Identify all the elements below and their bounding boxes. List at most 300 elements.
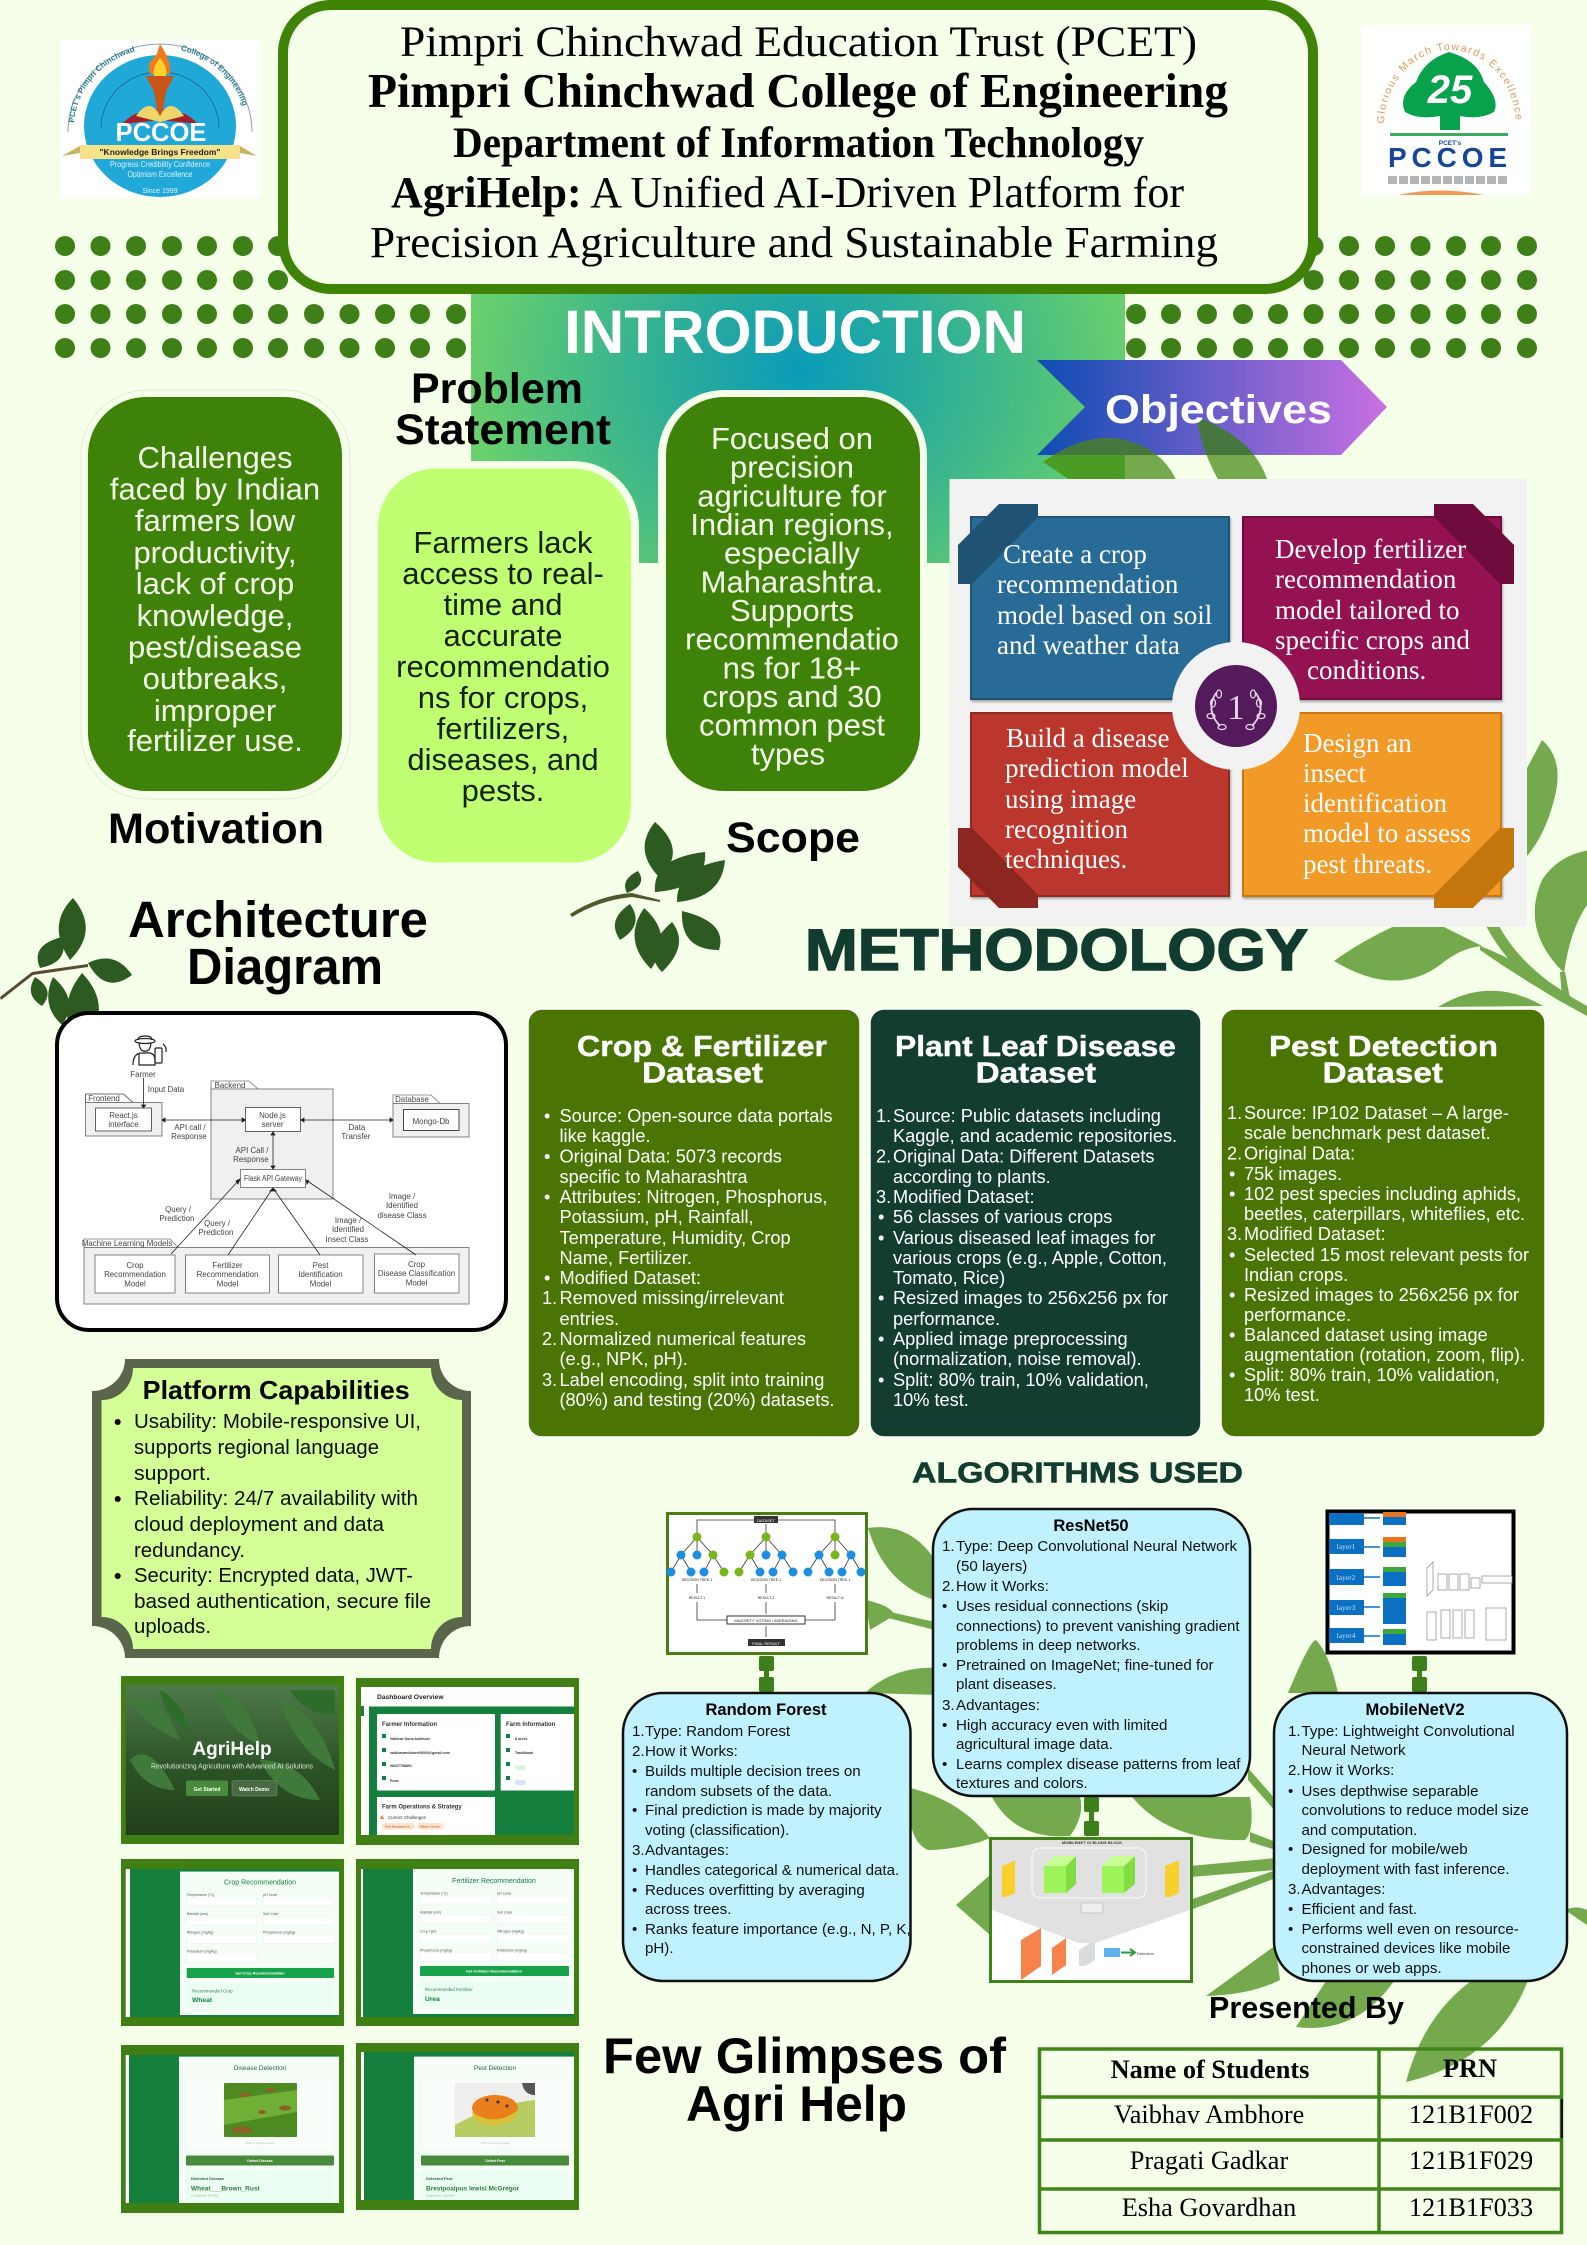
backend package: Node.js [259, 1111, 286, 1120]
screenshot: fertilizer recommendation [356, 1859, 579, 2026]
image: mobilenet block diagram: Detection [1137, 1951, 1154, 1956]
panel: pest detection dataset: • [1229, 1325, 1235, 1345]
objectives arrow [1037, 360, 1387, 455]
objective: insect identification: pest threats. [1303, 849, 1432, 879]
objective: fertilizer recommendation: recommendation [1275, 564, 1457, 594]
panel: architecture diagram: Input Data [148, 1085, 185, 1094]
arrow labels: Transfer [341, 1132, 371, 1141]
panel: resnet50: Learns complex disease patterns from leaf [956, 1756, 1241, 1773]
frontend package [86, 1094, 162, 1136]
panel: plant leaf disease dataset: • [878, 1288, 884, 1308]
panel: plant leaf disease dataset: • [878, 1207, 884, 1227]
panel: plant leaf disease dataset: 10% test. [893, 1390, 969, 1410]
image: mobilenet block diagram: MOBILENET V2 BLDNG BLOCK [1062, 1840, 1122, 1845]
panel: platform capabilities: Usability: Mobile-responsive UI, [134, 1411, 421, 1433]
panel: crop and fertilizer dataset: Label encoding, split into training [560, 1370, 824, 1390]
panel: mobilenetv2: Neural Network [1302, 1742, 1406, 1759]
screenshot: fertilizer recommendation: Crop Type [420, 1930, 437, 1934]
image: random forest diagram [666, 1514, 866, 1654]
objective: crop recommendation: model based on soil [997, 600, 1212, 630]
frontend package: Frontend [88, 1094, 120, 1103]
panel: platform capabilities: cloud deployment and data [134, 1514, 385, 1536]
panel: crop and fertilizer dataset: specific to Maharashtra [560, 1167, 748, 1187]
panel: pest detection dataset: Modified Dataset: [1244, 1224, 1386, 1244]
panel: plant leaf disease dataset: 56 classes of various crops [893, 1207, 1112, 1227]
backend package: Flask API Gateway [244, 1174, 302, 1183]
panel: pest detection dataset: augmentation (rotation, zoom, flip). [1244, 1345, 1525, 1365]
image: random forest diagram: DATASET [757, 1518, 775, 1523]
objective: insect identification [1243, 713, 1514, 908]
panel: mobilenetv2: Designed for mobile/web [1302, 1841, 1468, 1858]
arrow labels: disease Class [377, 1211, 427, 1220]
screenshot: fertilizer recommendation: Recommended Fertilizer [425, 1987, 473, 1992]
screenshot: pest detection: Detect Pest [485, 2159, 506, 2163]
arrow labels: Data [349, 1123, 366, 1132]
panel: mobilenetv2: Uses depthwise separable [1302, 1783, 1479, 1800]
image: random forest diagram: DECISION TREE-1 [820, 1578, 850, 1582]
heading: few glimpses [603, 2027, 1006, 2132]
screenshot: crop recommendation: Phosphorus (mg/kg) [263, 1930, 295, 1934]
panel: pest detection dataset [1221, 1009, 1545, 1437]
panel: scope: agriculture for [697, 478, 887, 513]
screenshot: dashboard overview [356, 1678, 579, 1845]
logo: 25 years [1361, 25, 1531, 195]
logo: PCCOE crest: PCCOE [116, 117, 206, 147]
logo: PCCOE crest [60, 40, 261, 198]
panel: random forest: 1. [632, 1723, 645, 1740]
panel: pest detection dataset: Source: IP102 Dataset – A large- [1244, 1103, 1509, 1123]
panel: motivation: productivity, [133, 535, 297, 570]
panel: pest detection dataset: 10% test. [1244, 1385, 1320, 1405]
panel: crop and fertilizer dataset: Potassium, pH, Rainfall, [560, 1207, 754, 1227]
objective: disease prediction: recognition [1005, 814, 1128, 844]
panel: plant leaf disease dataset [870, 1009, 1201, 1437]
arrow labels: Image / [335, 1216, 362, 1225]
panel: crop and fertilizer dataset: Source: Open-source data portals [560, 1106, 832, 1126]
panel: scope: Maharashtra. [701, 564, 883, 599]
screenshot: crop recommendation: Recommended Crop [192, 1988, 233, 1994]
objective: insect identification: identification [1303, 788, 1447, 818]
panel: scope: Supports [730, 593, 854, 628]
screenshot: disease detection: Disease Detection [234, 2065, 287, 2072]
screenshot: fertilizer recommendation: Urea [425, 1996, 440, 2003]
logo: PCCOE crest: Since 1999 [142, 188, 178, 195]
panel: mobilenetv2: 1. [1288, 1723, 1301, 1740]
database package [393, 1095, 469, 1137]
panel: resnet50: • [942, 1657, 947, 1674]
panel: plant leaf disease dataset: • [878, 1370, 884, 1390]
panel: pest detection dataset: 1. [1227, 1103, 1242, 1123]
panel: plant leaf disease dataset: Dataset [976, 1058, 1096, 1090]
panel: problem statement [370, 461, 639, 870]
panel: mobilenetv2: phones or web apps. [1302, 1960, 1442, 1977]
panel: scope: Focused on [711, 421, 873, 456]
backend package: server [262, 1120, 284, 1129]
panel: random forest: voting (classification). [645, 1822, 789, 1839]
panel: resnet50: How it Works: [956, 1578, 1049, 1595]
panel: plant leaf disease dataset: 1. [876, 1106, 891, 1126]
panel: mobilenetv2: Efficient and fast. [1302, 1901, 1417, 1918]
panel: random forest: Builds multiple decision trees on [645, 1763, 861, 1780]
screenshot: disease detection: Wheat___Brown_Rust [191, 2186, 260, 2192]
panel: scope: common pest [699, 708, 885, 743]
panel: random forest: Final prediction is made by majority [645, 1802, 882, 1819]
panel: plant leaf disease dataset: performance. [893, 1309, 1000, 1329]
screenshot: crop recommendation: Get Crop Recommendation [235, 1972, 285, 1976]
panel: resnet50: textures and colors. [956, 1775, 1088, 1792]
panel: scope [658, 390, 927, 799]
panel: crop and fertilizer dataset: • [544, 1187, 550, 1207]
panel: crop and fertilizer dataset: 2. [542, 1329, 557, 1349]
panel: plant leaf disease dataset: (normalization, noise removal). [893, 1349, 1142, 1369]
panel: mobilenetv2: and computation. [1302, 1822, 1417, 1839]
screenshot: pest detection: Confidence: 100.00% [426, 2194, 455, 2198]
arrow labels: Query / [204, 1219, 231, 1228]
title panel: AgriHelp: A Unified AI-Driven Platform for [391, 168, 1184, 217]
heading: architecture diagram: Diagram [187, 938, 383, 995]
database package: Database [395, 1095, 429, 1104]
screenshot: dashboard overview: Market Access [420, 1824, 440, 1828]
panel: motivation: Challenges [137, 440, 293, 475]
screenshot: dashboard overview: Pune [390, 1779, 399, 1783]
panel: pest detection dataset: • [1229, 1164, 1235, 1184]
introduction gradient banner [471, 294, 1125, 563]
heading: algorithms used: ALGORITHMS USED [912, 1458, 1243, 1490]
table: students: Esha Govardhan [1122, 2193, 1296, 2222]
image: random forest diagram: RESULT-N [826, 1596, 844, 1600]
panel: plant leaf disease dataset: Source: Public datasets including [893, 1106, 1161, 1126]
screenshot: crop recommendation [121, 1859, 344, 2026]
panel: pest detection dataset: • [1229, 1365, 1235, 1385]
objective: disease prediction: using image [1005, 784, 1136, 814]
panel: plant leaf disease dataset: according to plants. [893, 1167, 1051, 1187]
panel: scope: especially [724, 536, 861, 571]
panel: crop and fertilizer dataset: Temperature, Humidity, Crop [560, 1228, 791, 1248]
objectives label: Objectives [1105, 388, 1332, 432]
screenshot: dashboard overview: 8 acres [515, 1737, 527, 1741]
panel: scope: ns for 18+ [723, 650, 861, 685]
heading: problem statement [395, 365, 611, 454]
panel: mobilenetv2: 3. [1288, 1881, 1301, 1898]
arrow labels: Prediction [198, 1228, 233, 1237]
panel: resnet50: Type: Deep Convolutional Neural Network [956, 1538, 1238, 1555]
panel: resnet50: connections) to prevent vanishing gradient [956, 1618, 1240, 1635]
objective: insect identification: Design an [1303, 728, 1412, 758]
table: students: Name of Students [1111, 2055, 1309, 2084]
database package: Mongo-Db [413, 1117, 450, 1126]
panel: objectives infographic [950, 479, 1527, 927]
panel: mobilenetv2: Type: Lightweight Convolutional [1302, 1723, 1515, 1740]
screenshot: dashboard overview: Current Challenges [388, 1815, 427, 1820]
table: students [1039, 2049, 1563, 2232]
panel: platform capabilities: uploads. [134, 1616, 211, 1638]
panel: resnet50: • [942, 1717, 947, 1734]
screenshot: dashboard overview: 08037798891 [390, 1764, 412, 1768]
screenshot: agrihelp landing page: Revolutionizing Agriculture with Advanced AI Solutions [151, 1762, 313, 1771]
screenshot: disease detection: Detect Disease [247, 2159, 273, 2163]
panel: problem statement: diseases, and [407, 742, 599, 777]
panel: platform capabilities [92, 1359, 471, 1658]
objective: fertilizer recommendation: model tailored to [1275, 595, 1459, 625]
dot pattern left [55, 236, 466, 358]
panel: scope: types [751, 736, 825, 771]
screenshot: dashboard overview: Pest Management [385, 1824, 410, 1828]
objective: fertilizer recommendation: Develop fertilizer [1275, 534, 1466, 564]
panel: random forest: random subsets of the data. [645, 1783, 832, 1800]
objective: fertilizer recommendation: specific crops and [1275, 625, 1470, 655]
panel: crop and fertilizer dataset: Original Data: 5073 records [560, 1146, 782, 1166]
arrow labels: Response [233, 1155, 269, 1164]
panel: resnet50: Uses residual connections (skip [956, 1598, 1168, 1615]
panel: mobilenetv2: • [1288, 1901, 1293, 1918]
screenshot: fertilizer recommendation: pH Level [497, 1892, 511, 1896]
objective: disease prediction [958, 713, 1229, 908]
panel: platform capabilities: redundancy. [134, 1540, 245, 1562]
screenshot: crop recommendation: Nitrogen (mg/kg) [187, 1930, 213, 1934]
panel: platform capabilities: support. [134, 1463, 211, 1485]
machine learning package: Machine Learning Models [82, 1239, 172, 1248]
heading: motivation: Motivation [108, 805, 324, 853]
panel: architecture diagram [57, 1013, 506, 1330]
screenshot: agrihelp landing page: Get Started [194, 1787, 220, 1793]
panel: pest detection dataset: Split: 80% train, 10% validation, [1244, 1365, 1500, 1385]
panel: pest detection dataset: 2. [1227, 1144, 1242, 1164]
logo: PCCOE crest: PCET's Pimpri Chinchwad [68, 46, 135, 122]
table: students: 121B1F033 [1409, 2193, 1533, 2222]
panel: mobilenetv2: constrained devices like mobile [1302, 1940, 1510, 1957]
objective: crop recommendation [958, 504, 1229, 699]
panel: random forest: Type: Random Forest [645, 1723, 791, 1740]
panel: mobilenetv2 [1274, 1693, 1567, 1981]
panel: plant leaf disease dataset: Split: 80% train, 10% validation, [893, 1370, 1149, 1390]
heading: methodology: METHODOLOGY [805, 918, 1308, 983]
title panel: Precision Agriculture and Sustainable Farming [370, 218, 1218, 267]
panel: random forest [623, 1693, 911, 1981]
screenshot: dashboard overview: Dashboard Overview [377, 1694, 444, 1701]
panel: motivation: fertilizer use. [127, 723, 303, 758]
heading: problem statement: Problem [411, 365, 583, 413]
image: mobilenet block diagram [990, 1838, 1192, 1982]
panel: random forest: • [632, 1802, 637, 1819]
panel: plant leaf disease dataset: • [878, 1329, 884, 1349]
panel: mobilenetv2: convolutions to reduce model size [1302, 1802, 1529, 1819]
panel: problem statement: accurate [444, 618, 562, 653]
objective: crop recommendation: recommendation [997, 569, 1179, 599]
screenshot: agrihelp landing page [121, 1676, 344, 1844]
image: resnet diagram: layer1 [1337, 1542, 1356, 1551]
panel: problem statement: access to real- [402, 556, 604, 591]
panel: platform capabilities: Reliability: 24/7 availability with [134, 1488, 418, 1510]
panel: pest detection dataset: 75k images. [1244, 1164, 1342, 1184]
panel: pest detection dataset: 102 pest species including aphids, [1244, 1184, 1521, 1204]
panel: plant leaf disease dataset: Plant Leaf Disease [895, 1031, 1176, 1063]
objective: fertilizer recommendation [1243, 504, 1514, 699]
panel: plant leaf disease dataset: various crops (e.g., Apple, Cotton, [893, 1248, 1167, 1268]
screenshot: pest detection: Click to change image [480, 2141, 510, 2145]
screenshot: crop recommendation: Soil Color [263, 1912, 279, 1916]
screenshot: pest detection: Detected Pest [426, 2176, 453, 2181]
panel: random forest: How it Works: [645, 1743, 738, 1760]
logo: PCCOE crest: College of Engineering [182, 46, 247, 106]
dot pattern right [1126, 236, 1537, 358]
panel: pest detection dataset: performance. [1244, 1305, 1351, 1325]
panel: motivation [81, 390, 350, 799]
panel: plant leaf disease dataset: Tomato, Rice) [893, 1268, 1005, 1288]
panel: crop and fertilizer dataset: Attributes: Nitrogen, Phosphorus, [560, 1187, 827, 1207]
panel: resnet50: High accuracy even with limited [956, 1717, 1167, 1734]
screenshot: dashboard overview: Vaibhav Dona Ambhore [390, 1737, 430, 1741]
panel: resnet50: • [942, 1598, 947, 1615]
logo: PCCOE crest: "Knowledge Brings Freedom" [100, 147, 220, 157]
panel: pest detection dataset: Pest Detection [1269, 1031, 1498, 1063]
screenshot: crop recommendation: Potassium (mg/kg) [187, 1950, 217, 1954]
panel: mobilenetv2: How it Works: [1302, 1762, 1394, 1779]
table: students: PRN [1443, 2054, 1497, 2083]
objective: crop recommendation: and weather data [997, 630, 1180, 660]
machine learning package: Disease Classification [378, 1269, 455, 1278]
image: resnet diagram: layer3 [1337, 1603, 1356, 1612]
screenshot: dashboard overview: vaibhavambhore00003@gmail.com [390, 1751, 450, 1755]
arrow labels: Identified [332, 1225, 364, 1234]
image: random forest diagram: FINAL RESULT [752, 1641, 780, 1646]
arrow labels: Identified [386, 1201, 418, 1210]
panel: random forest: Ranks feature importance (e.g., N, P, K, [645, 1921, 911, 1938]
panel: pest detection dataset: Selected 15 most relevant pests for [1244, 1245, 1529, 1265]
heading: presented by: Presented By [1209, 1991, 1404, 2025]
panel: motivation: lack of crop [136, 566, 294, 601]
panel: random forest: 3. [632, 1842, 645, 1859]
image: random forest diagram: RESULT-2 [758, 1596, 774, 1600]
machine learning package: Crop [408, 1260, 426, 1269]
image: random forest diagram: RESULT-1 [689, 1596, 705, 1600]
frontend package: interface [108, 1120, 139, 1129]
image: resnet diagram: layer2 [1337, 1573, 1356, 1582]
title panel: Pimpri Chinchwad Education Trust (PCET) [400, 18, 1197, 66]
panel: mobilenetv2: 2. [1288, 1762, 1301, 1779]
panel: crop and fertilizer dataset: 3. [542, 1370, 557, 1390]
panel: motivation: outbreaks, [143, 661, 287, 696]
title panel: Pimpri Chinchwad College of Engineering [368, 63, 1228, 118]
image: random forest diagram: MAJORITY VOTING / AVERAGING [734, 1618, 798, 1623]
table: students: Vaibhav Ambhore [1114, 2100, 1304, 2129]
panel: resnet50: problems in deep networks. [956, 1637, 1141, 1654]
arrow labels: Image / [389, 1192, 416, 1201]
overlay leaves on gradient and arrow [1043, 417, 1254, 479]
panel: mobilenetv2: MobileNetV2 [1365, 1701, 1465, 1719]
panel: pest detection dataset: Dataset [1322, 1058, 1443, 1090]
panel: pest detection dataset: Original Data: [1244, 1144, 1355, 1164]
panel: resnet50 [933, 1509, 1250, 1796]
screenshot: pest detection [356, 2043, 579, 2210]
panel: motivation: improper [154, 693, 276, 728]
arrow labels: Query / [165, 1205, 192, 1214]
machine learning package: Recommendation [104, 1270, 166, 1279]
panel: crop and fertilizer dataset: • [544, 1146, 550, 1166]
panel: crop and fertilizer dataset: entries. [560, 1309, 619, 1329]
panel: resnet50: Advantages: [956, 1697, 1040, 1714]
panel: crop and fertilizer dataset: Dataset [642, 1058, 763, 1090]
panel: resnet50: plant diseases. [956, 1676, 1057, 1693]
panel: pest detection dataset: 3. [1227, 1224, 1242, 1244]
panel: random forest: • [632, 1862, 637, 1879]
panel: resnet50: 3. [942, 1697, 955, 1714]
frontend package: React.js [109, 1111, 138, 1120]
panel: mobilenetv2: • [1288, 1783, 1293, 1800]
screenshot: disease detection: Detected Disease [191, 2176, 225, 2181]
screenshot: dashboard overview: Farm Operations & Strategy [382, 1804, 462, 1810]
panel: crop and fertilizer dataset: • [544, 1268, 550, 1288]
backend package [211, 1081, 333, 1199]
screenshot: disease detection: Confidence: 99.90% [191, 2194, 218, 2198]
machine learning package: Pest [313, 1261, 329, 1270]
machine learning package [82, 1239, 469, 1304]
screenshot: fertilizer recommendation: Fertilizer Recommendation [452, 1878, 536, 1885]
arrow labels: Response [171, 1132, 207, 1141]
panel: platform capabilities: Platform Capabilities [143, 1375, 410, 1405]
panel: random forest: Reduces overfitting by averaging [645, 1882, 865, 1899]
panel: crop and fertilizer dataset: Name, Fertilizer. [560, 1248, 692, 1268]
panel: random forest: • [632, 1763, 637, 1780]
heading: problem statement: Statement [395, 406, 611, 454]
panel: plant leaf disease dataset: Modified Dataset: [893, 1187, 1035, 1207]
machine learning package: Model [406, 1278, 427, 1288]
panel: plant leaf disease dataset: 2. [876, 1146, 891, 1166]
background plant: algorithms branch [865, 1527, 1587, 2082]
panel: plant leaf disease dataset: Resized images to 256x256 px for [893, 1288, 1168, 1308]
table: students: 121B1F002 [1409, 2100, 1533, 2129]
panel: architecture diagram: Farmer [130, 1070, 156, 1079]
panel: random forest: Handles categorical & numerical data. [645, 1862, 899, 1879]
logo: 25 years: PCET's [1439, 140, 1462, 147]
panel: motivation: knowledge, [137, 598, 293, 633]
heading: few glimpses: Agri Help [686, 2075, 907, 2132]
background plant: upper right leaves [1043, 417, 1587, 1016]
heading: architecture diagram [128, 891, 428, 995]
objective: insect identification: insect [1303, 758, 1366, 788]
panel: pest detection dataset: Balanced dataset using image [1244, 1325, 1488, 1345]
panel: pest detection dataset: • [1229, 1184, 1235, 1204]
icon: laurel number one [1195, 665, 1277, 747]
panel: problem statement: pests. [462, 773, 544, 808]
panel: resnet50: agricultural image data. [956, 1736, 1113, 1753]
table: students: 121B1F029 [1409, 2146, 1533, 2175]
screenshot: pest detection: Pest Detection [474, 2065, 517, 2072]
screenshot: fertilizer recommendation: Rainfall (mm) [420, 1910, 441, 1914]
panel: random forest: Random Forest [705, 1701, 827, 1719]
image: random forest diagram: DECISION TREE-1 [682, 1578, 712, 1582]
panel: mobilenetv2: • [1288, 1921, 1293, 1938]
heading: scope: Scope [726, 814, 860, 862]
panel: random forest: • [632, 1882, 637, 1899]
panel: plant leaf disease dataset: Applied image preprocessing [893, 1329, 1128, 1349]
objective: disease prediction: prediction model [1005, 753, 1189, 783]
panel: problem statement: fertilizers, [437, 711, 569, 746]
screenshot: disease detection: Click to change image [245, 2141, 275, 2145]
screenshot: fertilizer recommendation: Get Fertilizer Recommendation [466, 1970, 523, 1974]
panel: crop and fertilizer dataset: (80%) and testing (20%) datasets. [560, 1390, 834, 1410]
panel: crop and fertilizer dataset: 1. [542, 1288, 557, 1308]
connectors [759, 1656, 1427, 1836]
panel: crop and fertilizer dataset: Modified Dataset: [560, 1268, 701, 1288]
logo: 25 years: 25 [1427, 68, 1473, 112]
table: students: Pragati Gadkar [1130, 2146, 1288, 2175]
panel: random forest: Advantages: [645, 1842, 729, 1859]
panel: resnet50: ResNet50 [1053, 1517, 1129, 1535]
arrow labels: API call / [174, 1123, 206, 1132]
panel: crop and fertilizer dataset: Normalized numerical features [560, 1329, 806, 1349]
panel: pest detection dataset: Indian crops. [1244, 1265, 1348, 1285]
panel: platform capabilities: supports regional language [134, 1437, 379, 1459]
